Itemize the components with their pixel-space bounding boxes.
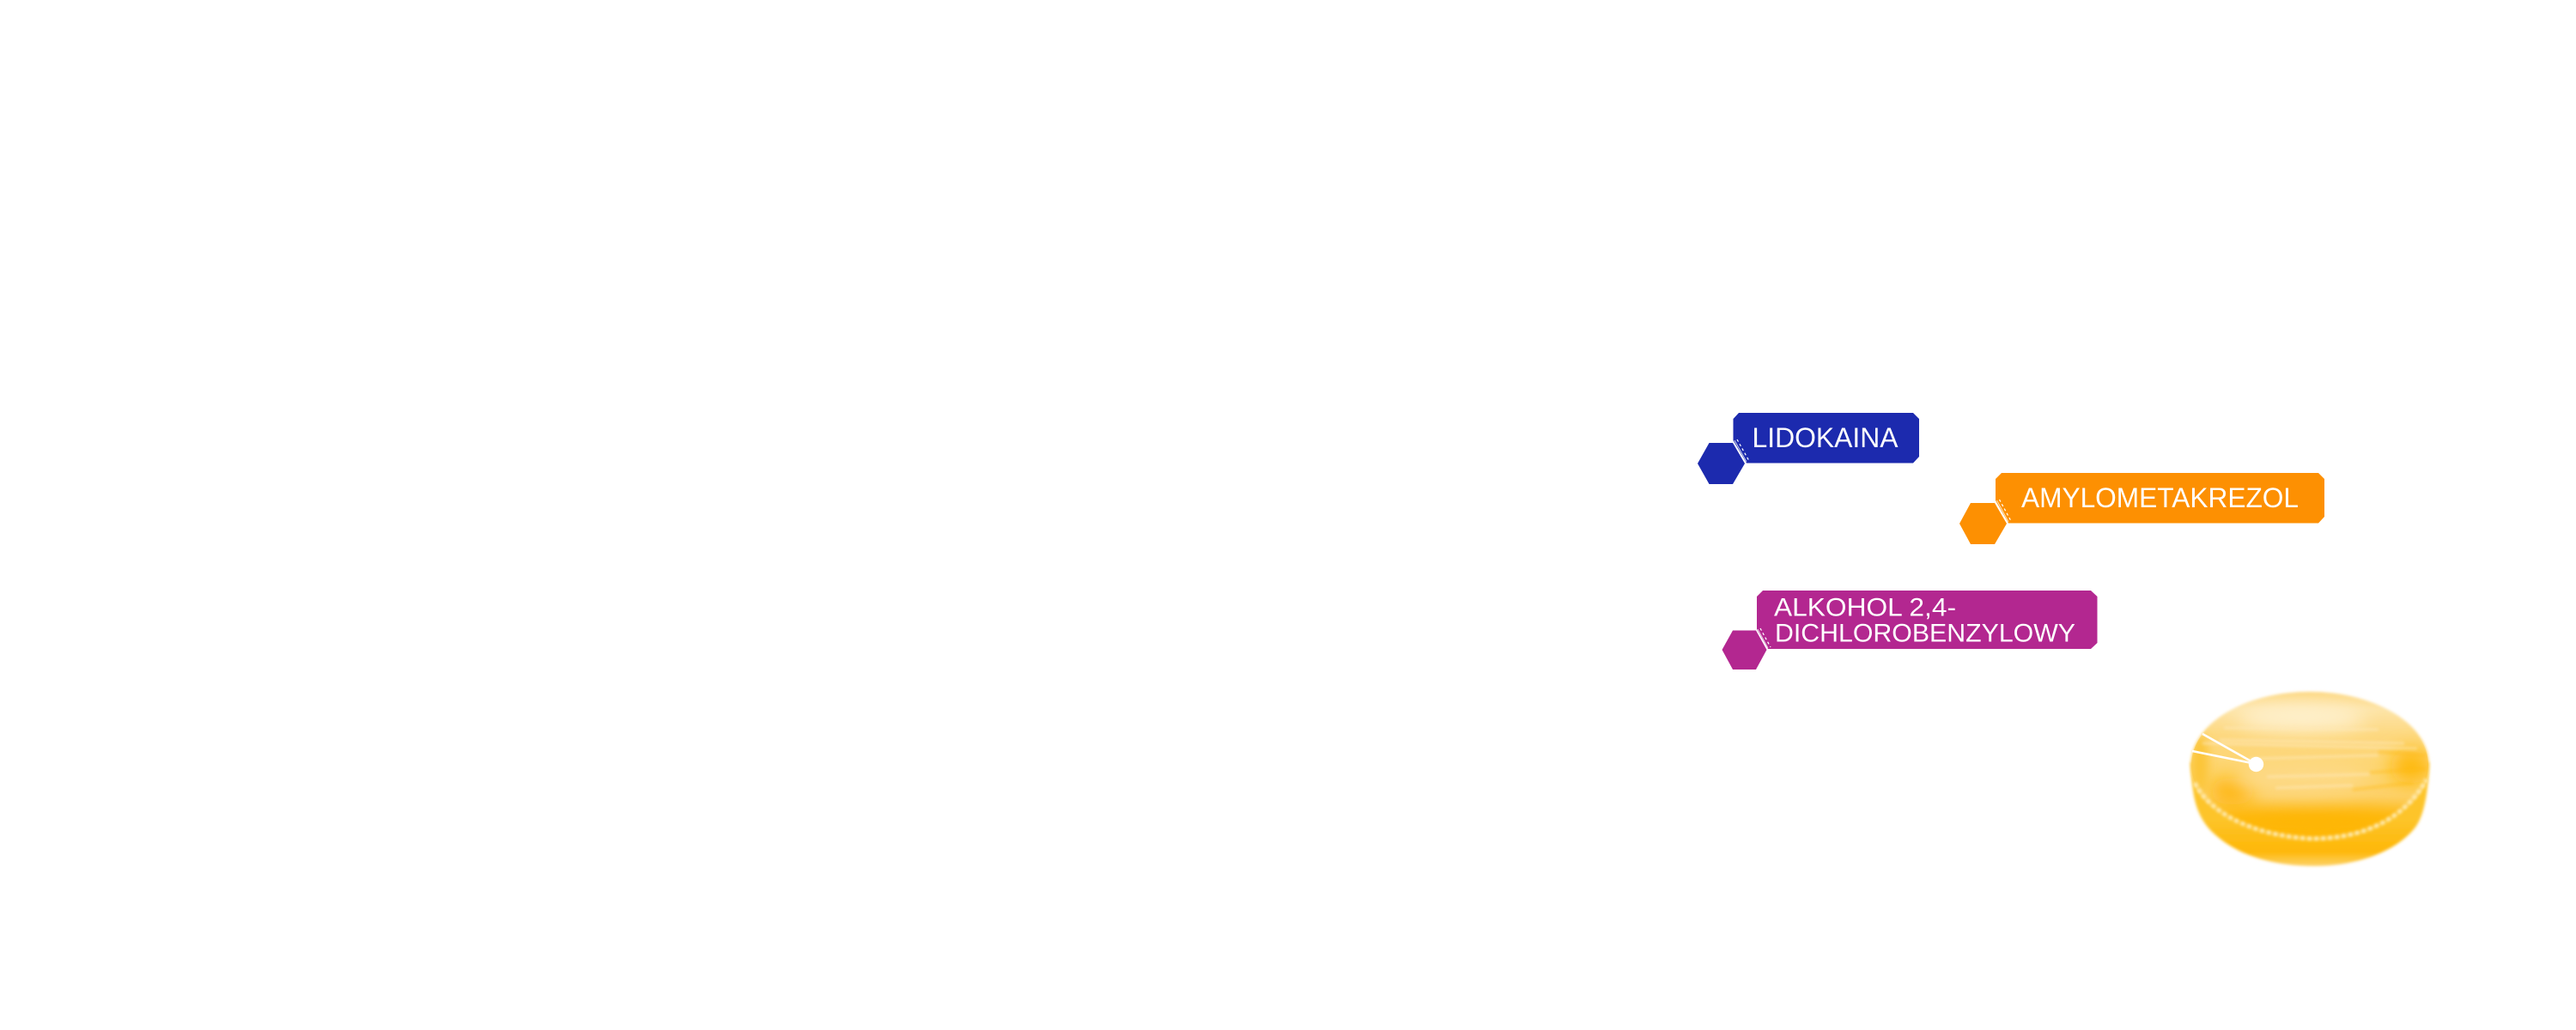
lozenge rim highlight [2195,779,2427,839]
label: alkohol 2,4-dichlorobenzylowy [1722,591,2097,670]
label: lidokaina [1698,413,1919,484]
icon: orange hexagon [1959,503,2007,544]
lozenge top face [2190,692,2429,838]
orange label box [1996,473,2324,524]
label text: lidokaina: LIDOKAINA [1752,422,1899,453]
icon: purple hexagon [1722,630,1767,670]
blue label box [1733,413,1919,464]
purple label box [1757,591,2097,649]
lozenge shading [2191,704,2432,833]
lozenge body [2190,762,2429,866]
pointer lines and dot [2192,734,2263,772]
label: amylometakrezol [1959,473,2324,544]
label text: second line: DICHLOROBENZYLOWY [1775,619,2075,647]
icon: blue hexagon [1698,443,1745,484]
label text: amylometakrezol: AMYLOMETAKREZOL [2021,482,2299,513]
label text: first line: ALKOHOL 2,4- [1774,594,1956,621]
lozenge illustration [2190,692,2432,866]
